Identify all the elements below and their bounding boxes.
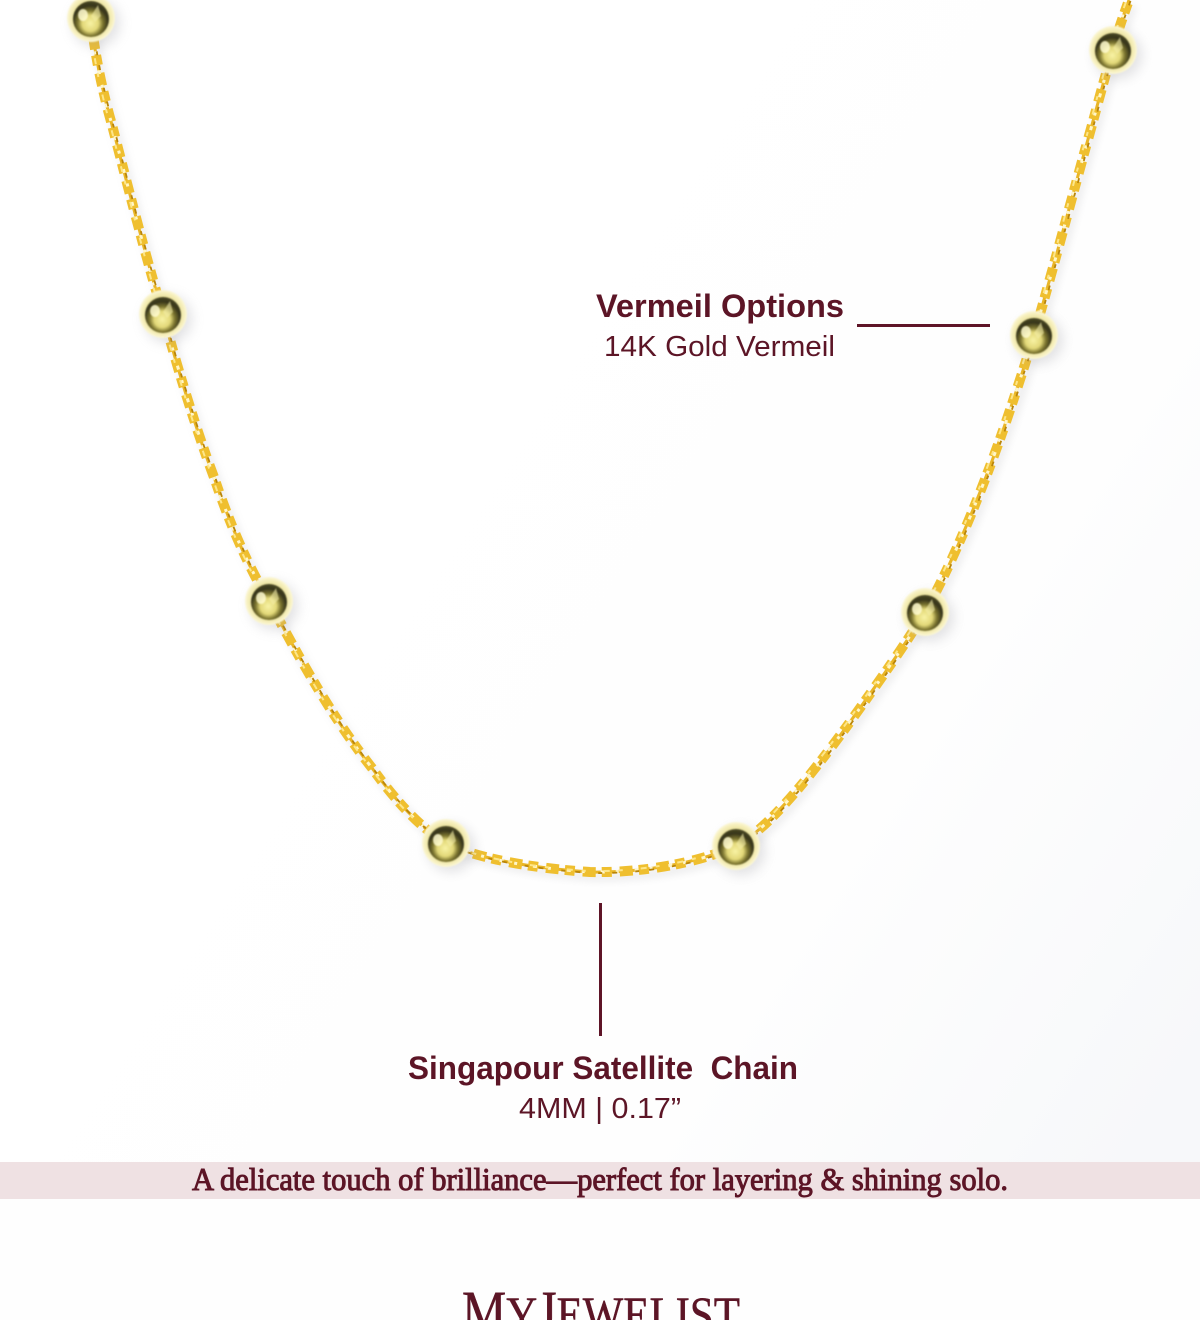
- bottom white area: [0, 1199, 1200, 1320]
- tagline: A delicate touch of brilliance—perfect for layering & shining solo.: [192, 1161, 1008, 1197]
- text: chain size: 4MM | 0.17”: [519, 1093, 681, 1125]
- bead 6: [901, 588, 954, 641]
- bead 1: [67, 0, 120, 47]
- leader line: chain: [599, 903, 602, 1036]
- bead 5: [712, 822, 765, 875]
- text: 14k gold vermeil: 14K Gold Vermeil: [604, 331, 835, 363]
- heading: singapour satellite chain: Singapour Satellite Chain: [408, 1050, 798, 1086]
- chain: [86, 0, 1133, 877]
- bead 2: [139, 290, 192, 343]
- necklace: [67, 0, 1142, 877]
- callout: vermeil options: [596, 288, 990, 363]
- leader line: vermeil: [857, 324, 990, 327]
- bead 3: [245, 577, 298, 630]
- bead 7: [1010, 311, 1063, 364]
- heading: vermeil options: Vermeil Options: [596, 288, 844, 324]
- bead 8: [1089, 26, 1142, 79]
- tagline band: [0, 1161, 1200, 1199]
- callout: chain type: [408, 903, 798, 1125]
- bead 4: [422, 819, 475, 872]
